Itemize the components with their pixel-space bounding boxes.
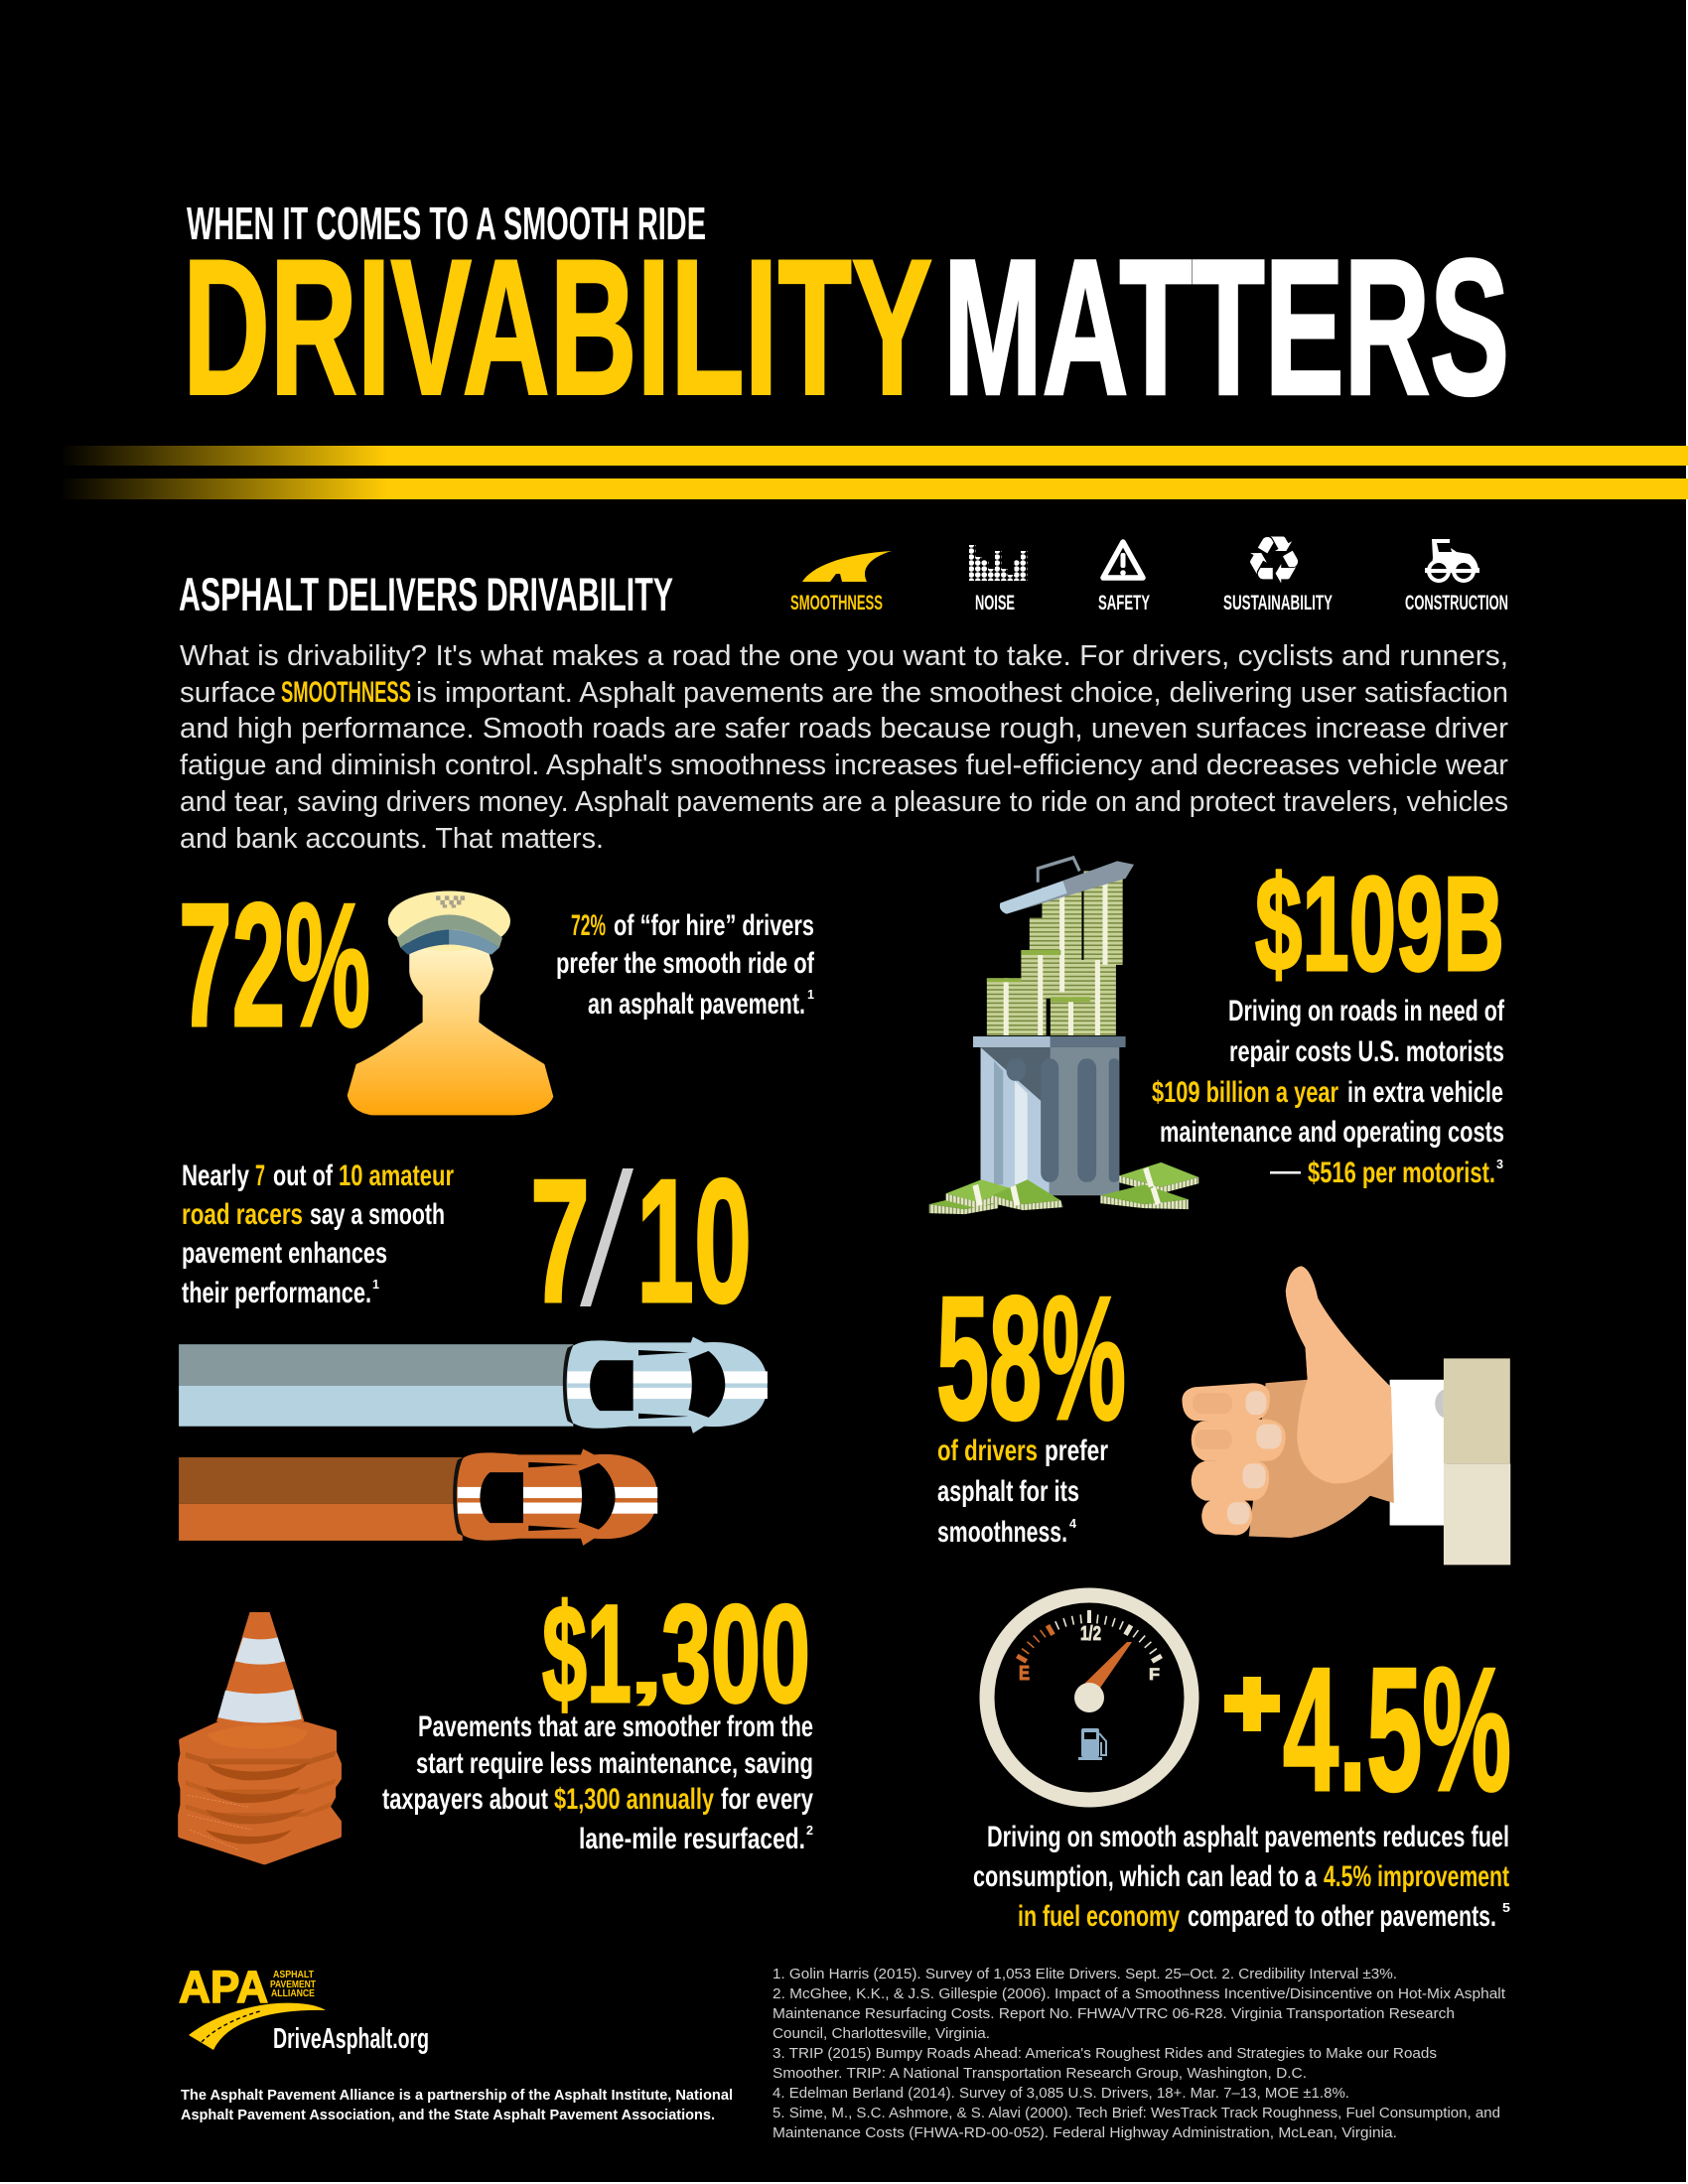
icon: fuel gauge xyxy=(987,1595,1192,1800)
text: fuel consumption: consumption, which can lead to a xyxy=(973,1860,1317,1893)
text: nearly 7 out of 10 amateur road racers: 10 amateur xyxy=(339,1160,454,1192)
logo: asphalt pavement alliance: ASPHALT xyxy=(273,1970,314,1980)
panel: 72 percent of drivers xyxy=(179,867,815,1115)
icon: noise equalizer: NOISE xyxy=(975,592,1015,614)
icon: recycling arrows: ♻ xyxy=(1244,522,1304,599)
text: 72% of for hire drivers xyxy=(556,909,815,1021)
icon: taxi driver silhouette xyxy=(348,890,553,1115)
text: nearly 7 out of 10 amateur road racers: pavement enhances xyxy=(182,1237,387,1270)
footnote references xyxy=(773,1967,1505,2141)
section heading: ASPHALT DELIVERS DRIVABILITY xyxy=(179,568,673,620)
text: roads in need of repair cost motorists: repair costs U.S. motorists xyxy=(1229,1035,1504,1068)
headline: drivability: DRIVABILITY xyxy=(183,220,932,435)
text: fuel consumption: 4.5% improvement xyxy=(1324,1860,1509,1893)
text: nearly 7 out of 10 amateur road racers: out of xyxy=(273,1160,334,1192)
big number: 58%: 58% xyxy=(936,1260,1126,1456)
text: nearly 7 out of 10 amateur road racers: Nearly xyxy=(182,1160,249,1192)
text: of drivers prefer asphalt: asphalt for its xyxy=(937,1475,1079,1508)
intro paragraph: What is drivability? It's what makes a road the one you want to take. For drivers, cyclists and runners, xyxy=(180,640,1508,672)
big number: $1,300: 300 xyxy=(661,1575,810,1731)
icon: safety triangle xyxy=(1098,542,1150,614)
big number: 7/10 xyxy=(530,1143,752,1339)
icon: recycling arrows: SUSTAINABILITY xyxy=(1223,592,1333,614)
big number: $109B: $109B xyxy=(1255,849,1504,999)
text: smoother pavements save taxpayers xyxy=(382,1710,813,1855)
text: roads in need of repair cost motorists: Driving on roads in need of xyxy=(1228,995,1505,1027)
icon: construction roller xyxy=(1405,539,1508,614)
logo: asphalt pavement alliance xyxy=(179,1962,429,2055)
footnote references: 3. TRIP (2015) Bumpy Roads Ahead: America's Roughest Rides and Strategies to Make our Roads xyxy=(773,2046,1437,2062)
text: roads in need of repair cost motorists: 3 xyxy=(1496,1157,1503,1171)
icon: blue race car with trail xyxy=(179,1337,768,1433)
icon: construction roller: CONSTRUCTION xyxy=(1405,592,1508,614)
text: of drivers prefer asphalt: 4 xyxy=(1069,1516,1077,1531)
text: of drivers prefer asphalt xyxy=(937,1434,1108,1549)
panel: 4.5 percent fuel economy xyxy=(973,1595,1511,1933)
icon: safety triangle: SAFETY xyxy=(1098,592,1150,614)
panel: $109B extra vehicle costs xyxy=(929,849,1505,1214)
footnote references: 2. McGhee, K.K., & J.S. Gillespie (2006). Impact of a Smoothness Incentive/Disincentive on Hot-Mix Asphalt xyxy=(773,1986,1505,2002)
can rim xyxy=(973,1036,1051,1047)
text: smoother pavements save taxpayers: taxpayers about xyxy=(382,1783,548,1816)
gauge needle xyxy=(1082,1642,1132,1694)
icon: orange race car with trail xyxy=(179,1449,657,1546)
text: of drivers prefer asphalt: smoothness. xyxy=(937,1516,1067,1549)
text: smoother pavements save taxpayers: $1,300 annually xyxy=(554,1783,714,1816)
text: fuel consumption: compared to other pavements. xyxy=(1188,1900,1496,1933)
text: nearly 7 out of 10 amateur road racers: 7 xyxy=(255,1160,265,1192)
fuel pump xyxy=(1078,1728,1106,1760)
footnote references: 5. Sime, M., S.C. Ashmore, & S. Alavi (2000). Tech Brief: WesTrack Track Roughness, Fuel Consumption, and xyxy=(773,2106,1500,2121)
big number: +4.5% xyxy=(1224,1631,1511,1828)
logo: asphalt pavement alliance: DriveAsphalt.org xyxy=(273,2023,429,2055)
footnote references: Maintenance Costs (FHWA-RD-00-052). Federal Highway Administration, McLean, Virginia. xyxy=(773,2125,1397,2141)
big number: 7/10: 10 xyxy=(636,1143,752,1339)
text: of drivers prefer asphalt: prefer xyxy=(1045,1434,1108,1467)
footnote references: 4. Edelman Berland (2014). Survey of 3,085 U.S. Drivers, 18+. Mar. 7–13, MOE ±1.8%. xyxy=(773,2086,1349,2102)
text: smoother pavements save taxpayers: for every xyxy=(721,1783,813,1816)
intro paragraph: SMOOTHNESS xyxy=(281,676,411,709)
intro paragraph: is important. Asphalt pavements are the smoothest choice, delivering user satisfaction xyxy=(416,677,1508,709)
panel: $1,300 maintenance savings xyxy=(181,1575,813,1862)
text: 72% of for hire drivers: 1 xyxy=(807,987,814,1002)
logo: asphalt pavement alliance: PAVEMENT xyxy=(270,1979,316,1990)
can body xyxy=(981,1047,1119,1195)
text: roads in need of repair cost motorists: in extra vehicle xyxy=(1347,1076,1503,1109)
footnote references: 1. Golin Harris (2015). Survey of 1,053 Elite Drivers. Sept. 25–Oct. 2. Credibility Interval ±3%. xyxy=(773,1967,1397,1982)
icon: noise equalizer xyxy=(969,545,1027,614)
text: nearly 7 out of 10 amateur road racers: say a smooth xyxy=(310,1198,445,1231)
big number: 7/10: 7 xyxy=(530,1143,590,1339)
big number: $1,300 xyxy=(542,1575,810,1731)
text: 72% of for hire drivers: 72% xyxy=(571,909,606,942)
money stacks xyxy=(987,871,1123,1035)
text: roads in need of repair cost motorists: maintenance and operating costs xyxy=(1160,1116,1504,1149)
text: fuel consumption xyxy=(973,1821,1510,1933)
icon: smoothness road: SMOOTHNESS xyxy=(790,592,883,614)
text: of drivers prefer asphalt: of drivers xyxy=(937,1434,1038,1467)
icon: traffic cone xyxy=(181,1612,339,1862)
text: roads in need of repair cost motorists: $516 per motorist. xyxy=(1308,1157,1495,1189)
footnote references: Maintenance Resurfacing Costs. Report No. FHWA/VTRC 06-R28. Virginia Transportation Research xyxy=(773,2006,1455,2022)
big number: +4.5%: 4.5% xyxy=(1283,1631,1511,1828)
icon: fuel gauge: F xyxy=(1149,1665,1160,1684)
icon row: drivability topics xyxy=(790,522,1508,614)
text: smoother pavements save taxpayers: Pavements that are smoother from the xyxy=(418,1710,813,1743)
text: 72% of for hire drivers: an asphalt pavement. xyxy=(588,988,805,1021)
footnote references: Council, Charlottesville, Virginia. xyxy=(773,2026,990,2042)
text: nearly 7 out of 10 amateur road racers: their performance. xyxy=(182,1277,371,1309)
gauge ticks xyxy=(1017,1610,1162,1662)
kicker: when it comes to a smooth ride: WHEN IT COMES TO A SMOOTH RIDE xyxy=(187,198,706,249)
intro paragraph: and bank accounts. That matters. xyxy=(180,823,604,855)
text: 72% of for hire drivers: of “for hire” drivers xyxy=(614,909,814,942)
icon: fuel gauge: 1/2 xyxy=(1080,1623,1101,1645)
footnote references: Smoother. TRIP: A National Transportation Research Group, Washington, D.C. xyxy=(773,2066,1307,2082)
partnership statement: Asphalt Pavement Association, and the State Asphalt Pavement Associations. xyxy=(181,2108,715,2123)
icon: smoothness road xyxy=(790,551,892,614)
intro paragraph: and high performance. Smooth roads are safer roads because rough, uneven surfaces increase driver xyxy=(180,713,1508,745)
big number: $1,300: $1 xyxy=(542,1575,632,1731)
lid and handle xyxy=(1038,858,1079,883)
spilled bills xyxy=(929,1195,998,1209)
text: nearly 7 out of 10 amateur road racers: 1 xyxy=(372,1277,379,1292)
intro paragraph xyxy=(180,640,1508,855)
text: smoother pavements save taxpayers: lane-mile resurfaced. xyxy=(579,1823,805,1855)
text: fuel consumption: in fuel economy xyxy=(1018,1900,1180,1933)
partnership statement: The Asphalt Pavement Alliance is a partnership of the Asphalt Institute, National xyxy=(181,2088,733,2104)
text: nearly 7 out of 10 amateur road racers xyxy=(182,1160,454,1309)
big number: 72%: 72% xyxy=(179,867,370,1063)
text: smoother pavements save taxpayers: start require less maintenance, saving xyxy=(416,1747,813,1780)
icon: thumbs up hand with sleeve xyxy=(1182,1266,1510,1565)
gauge labels: E xyxy=(1019,1663,1030,1685)
big number: $1,300: , xyxy=(627,1622,666,1710)
intro paragraph: surface xyxy=(180,677,276,709)
text: fuel consumption: 5 xyxy=(1502,1900,1510,1915)
text: 72% of for hire drivers: prefer the smooth ride of xyxy=(556,947,815,980)
double yellow road stripes xyxy=(60,446,1688,499)
partnership statement xyxy=(181,2088,733,2123)
intro paragraph: and tear, saving drivers money. Asphalt pavements are a pleasure to ride on and protect travelers, vehicles xyxy=(180,786,1508,818)
text: roads in need of repair cost motorists: $109 billion a year xyxy=(1152,1076,1338,1109)
text: roads in need of repair cost motorists xyxy=(1152,995,1505,1189)
panel: 7 of 10 road racers xyxy=(179,1143,768,1546)
text: nearly 7 out of 10 amateur road racers: road racers xyxy=(182,1198,303,1231)
title block xyxy=(183,198,1509,435)
logo: asphalt pavement alliance: APA xyxy=(179,1962,268,2012)
panel: 58 percent prefer asphalt xyxy=(936,1260,1510,1565)
icon: trash can full of money xyxy=(929,858,1198,1214)
text: smoother pavements save taxpayers: 2 xyxy=(806,1823,813,1838)
intro paragraph: fatigue and diminish control. Asphalt's smoothness increases fuel-efficiency and decreases vehicle wear xyxy=(180,750,1508,781)
logo: asphalt pavement alliance: ALLIANCE xyxy=(271,1988,315,1999)
icon: recycling arrows xyxy=(1223,522,1333,614)
